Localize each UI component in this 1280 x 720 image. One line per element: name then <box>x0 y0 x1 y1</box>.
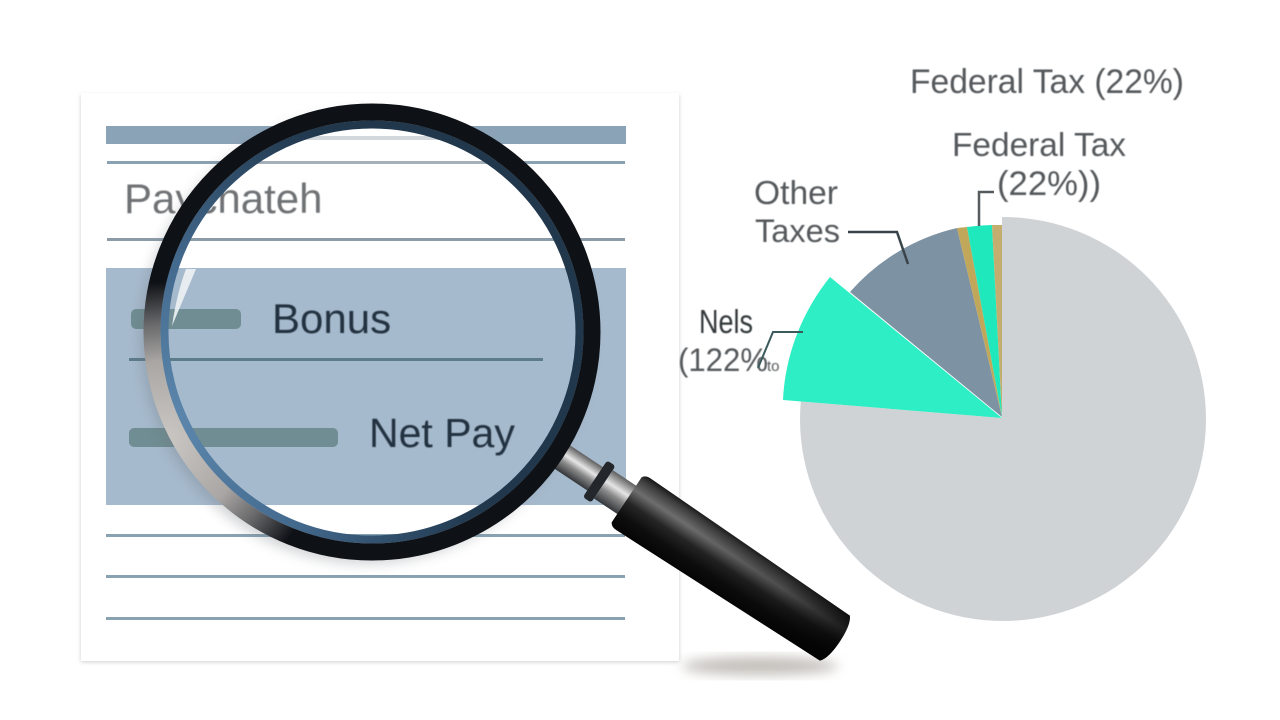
pie chart <box>780 200 1206 621</box>
label: other taxes callout: Other <box>754 174 838 211</box>
pie base: remaining share <box>800 217 1206 621</box>
heading: paycheck: Paychateh <box>124 175 322 222</box>
lens interior view: Net Pay <box>369 410 515 456</box>
metal neck <box>551 443 609 495</box>
bar and line outside lens <box>129 309 209 447</box>
highlighted pay section <box>106 268 626 505</box>
label: net callout: Nels <box>699 303 753 340</box>
white gap behind upper-left wedges <box>780 200 1002 418</box>
label: net callout: to <box>767 358 780 375</box>
label: federal tax callout: Federal Tax <box>952 126 1126 163</box>
label: federal tax callout <box>952 126 1126 226</box>
black grip <box>610 474 857 667</box>
ring: outer black rim fading to grey at lower left <box>152 112 592 552</box>
lens soft shadow <box>140 112 592 564</box>
shadow under magnifier handle <box>682 657 838 675</box>
wedge: exploded net share <box>783 277 1002 418</box>
label: net callout: (122% <box>678 342 768 378</box>
label: other taxes callout: Taxes <box>755 213 840 249</box>
lower rule lines <box>106 534 625 620</box>
lens interior view <box>168 128 576 536</box>
label: federal tax callout: (22%)) <box>997 165 1101 203</box>
wedge: thin orange <box>957 227 1002 417</box>
wedge: federal tax <box>967 225 1002 417</box>
header bar <box>106 126 626 144</box>
bonus row <box>168 309 241 329</box>
icon: handle <box>541 429 857 667</box>
label: federal tax top: Federal Tax (22%) <box>910 63 1184 101</box>
ring: inner blue rim <box>164 124 580 540</box>
infographic canvas <box>79 67 1206 680</box>
magnifying glass <box>106 110 857 667</box>
label: other taxes callout <box>754 174 908 264</box>
lens interior view: Paychateh <box>124 175 322 222</box>
net pay row <box>192 428 338 447</box>
wedge: thin orange right <box>992 225 1002 417</box>
wedge: other taxes <box>850 228 1002 417</box>
panel: paycheck document <box>81 93 679 662</box>
lens interior view: Bonus <box>272 295 391 342</box>
label: net callout <box>678 303 803 378</box>
glass glare <box>172 269 196 326</box>
